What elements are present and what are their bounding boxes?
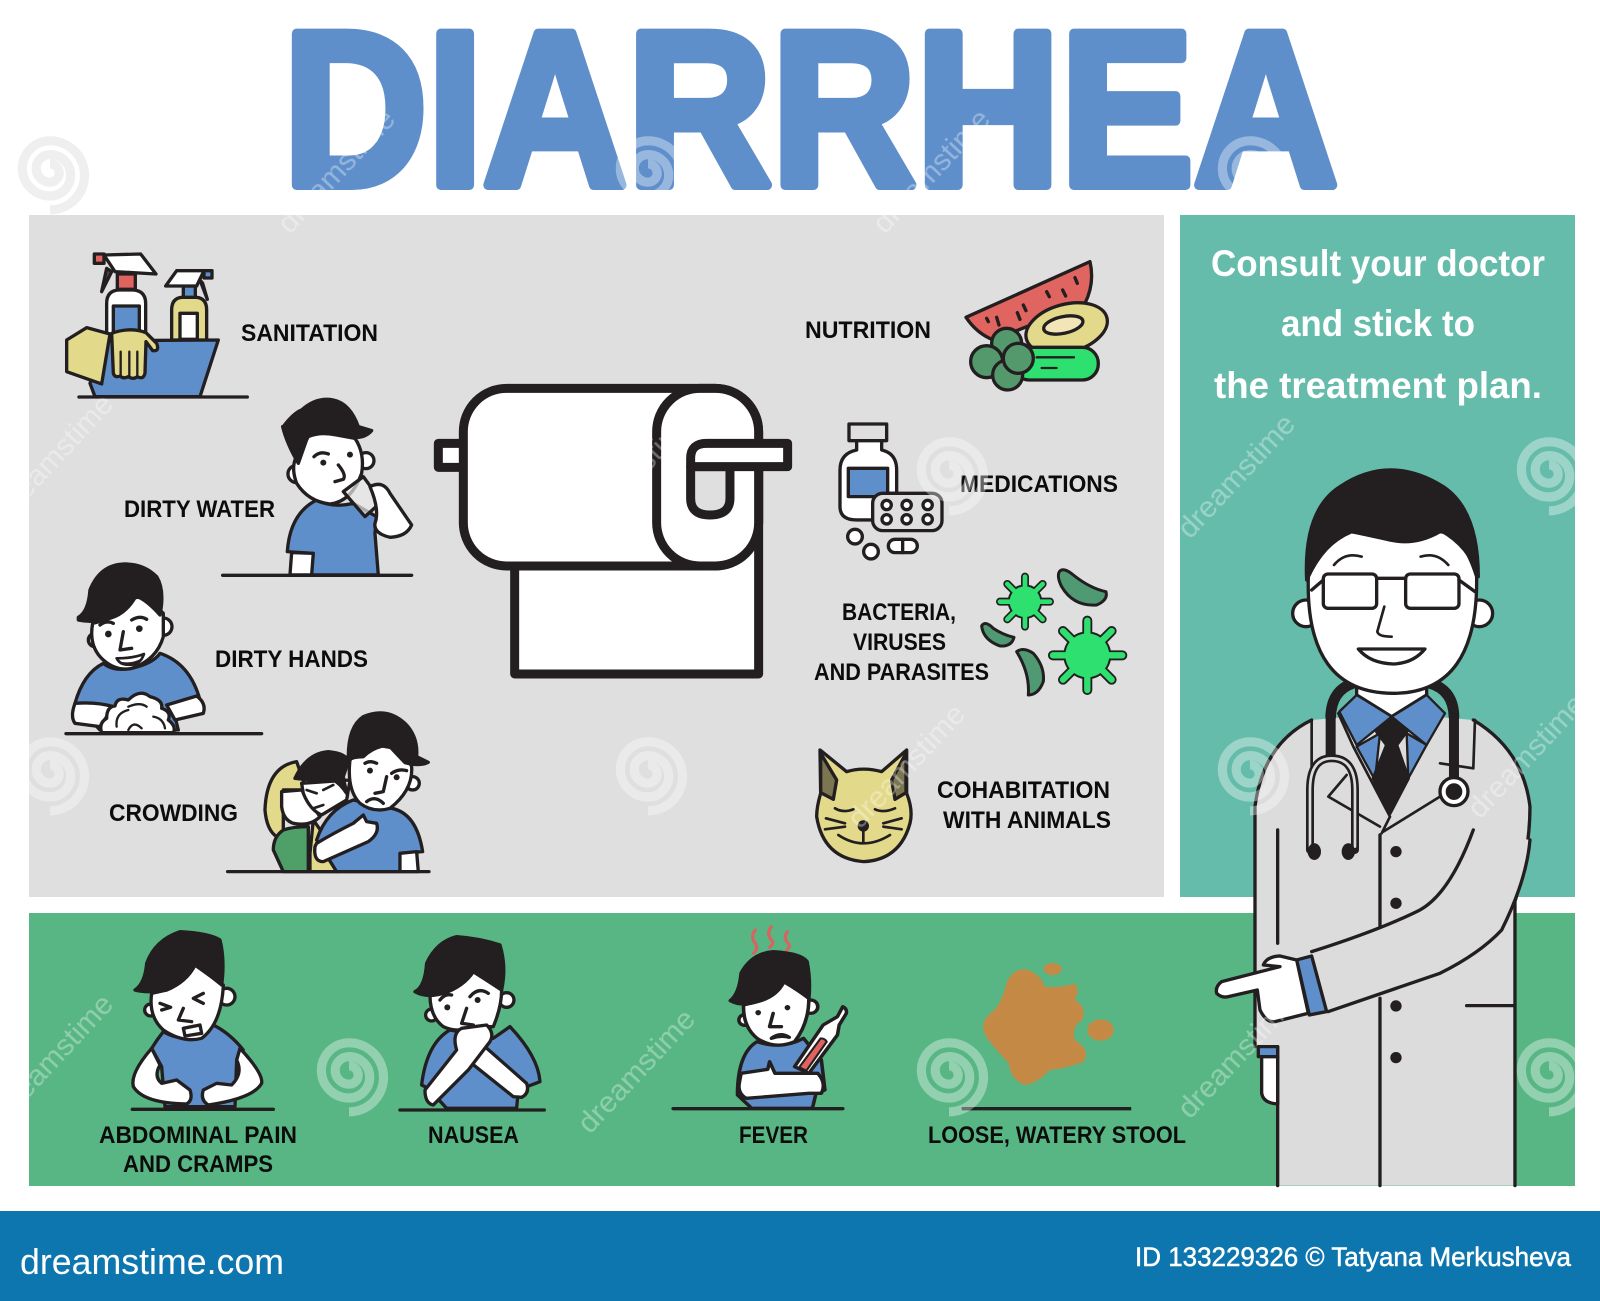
- label: abdominal pain and cramps: AND CRAMPS: [123, 1151, 273, 1178]
- icon: toilet paper roll: [438, 388, 788, 674]
- watermark spirals: [22, 141, 1583, 1112]
- icon: boy with nausea: [400, 937, 544, 1110]
- icon: medications: [840, 424, 942, 559]
- icon: nutrition food: [966, 262, 1113, 390]
- doctor coat outline: [1255, 720, 1530, 1186]
- label: fever: FEVER: [739, 1122, 808, 1149]
- doctor tie: [1373, 718, 1408, 813]
- doctor hair: [1306, 470, 1478, 580]
- watermark text: dreamstime: [571, 403, 702, 540]
- icon: boy with dirty hands: [66, 564, 262, 734]
- doctor brows: [1334, 555, 1448, 565]
- watermark text: dreamstime: [841, 698, 972, 835]
- icon: boy with abdominal pain: [132, 932, 273, 1109]
- advice text: the treatment plan.: [1214, 365, 1542, 406]
- doctor pointing hand: [1216, 956, 1308, 1022]
- coat lapels: [1312, 713, 1475, 833]
- advice text: Consult your doctor: [1211, 243, 1545, 284]
- watermark text: dreamstime: [571, 1003, 702, 1140]
- label: cohabitation with animals: WITH ANIMALS: [943, 807, 1111, 834]
- icon: sanitation supplies: [67, 254, 247, 397]
- stethoscope loop highlight: [1310, 758, 1355, 847]
- icon: loose stool splat: [962, 963, 1131, 1109]
- footer credit text: ID 133229326 © Tatyana Merkusheva: [1135, 1242, 1572, 1272]
- doctor glasses: [1312, 574, 1475, 608]
- label: nutrition: NUTRITION: [805, 317, 931, 344]
- stethoscope loop: [1310, 758, 1355, 850]
- stethoscope ear tips: [1308, 843, 1355, 860]
- doctor face: [1308, 532, 1477, 693]
- label: sanitation: SANITATION: [241, 320, 378, 347]
- label: abdominal pain and cramps: ABDOMINAL PAIN: [99, 1122, 297, 1149]
- panel: doctor advice background: [1180, 215, 1575, 897]
- label: dirty hands: DIRTY HANDS: [215, 646, 368, 673]
- label: medications: MEDICATIONS: [960, 471, 1118, 498]
- icon: boy with fever and thermometer: [673, 927, 846, 1109]
- panel: causes background: [29, 215, 1164, 897]
- label: dirty water: DIRTY WATER: [124, 496, 275, 523]
- label: cohabitation with animals: COHABITATION: [937, 777, 1110, 804]
- doctor shirt collar: [1339, 695, 1445, 780]
- watermark text: dreamstime: [271, 103, 402, 240]
- label: abdominal pain and cramps: [99, 1122, 297, 1178]
- watermark text: [0, 103, 1592, 1140]
- footer logo text: dreamstime.com: [20, 1241, 284, 1282]
- coat seams: [1278, 830, 1513, 1186]
- doctor smile: [1358, 649, 1425, 664]
- coat buttons: [1390, 846, 1402, 1063]
- doctor neck: [1357, 683, 1427, 717]
- doctor ears: [1293, 600, 1493, 627]
- watermark text: dreamstime: [1171, 988, 1302, 1125]
- icon: crowded people: [228, 713, 429, 872]
- doctor nose: [1377, 607, 1392, 637]
- watermark text: dreamstime: [866, 103, 997, 240]
- advice text: and stick to: [1281, 303, 1475, 344]
- stethoscope tubes: [1331, 713, 1454, 780]
- label: bacteria, viruses and parasites: AND PARASITES: [814, 659, 989, 686]
- label: crowding: CROWDING: [109, 800, 238, 827]
- icon: cat: [817, 750, 911, 862]
- watermark text: dreamstime: [1171, 408, 1302, 545]
- icon: boy drinking dirty water: [223, 399, 412, 575]
- stethoscope neck tube: [1331, 683, 1454, 717]
- label: nausea: NAUSEA: [428, 1122, 519, 1149]
- panel: symptoms background: [29, 913, 1575, 1186]
- footer bar: [0, 1211, 1600, 1301]
- doctor figure: [1216, 470, 1530, 1186]
- icon: bacteria and viruses: [982, 570, 1122, 695]
- doctor arm outline: [1312, 830, 1530, 1012]
- watermark text: dreamstime: [1461, 688, 1592, 825]
- doctor left cuff: [1258, 1047, 1278, 1057]
- label: loose, watery stool: LOOSE, WATERY STOOL: [928, 1122, 1186, 1149]
- doctor left hand: [1262, 1057, 1278, 1104]
- label: bacteria, viruses and parasites: VIRUSES: [853, 629, 946, 656]
- doctor coat fill: [1255, 713, 1530, 1186]
- doctor blue cuff: [1297, 956, 1327, 1015]
- label: bacteria, viruses and parasites: BACTERIA,: [842, 599, 956, 626]
- stethoscope chest piece: [1440, 778, 1468, 806]
- advice text: [1211, 243, 1545, 406]
- label: bacteria, viruses and parasites: [814, 599, 989, 686]
- doctor pointing arm: [1312, 830, 1530, 1012]
- label: cohabitation with animals: [937, 777, 1111, 834]
